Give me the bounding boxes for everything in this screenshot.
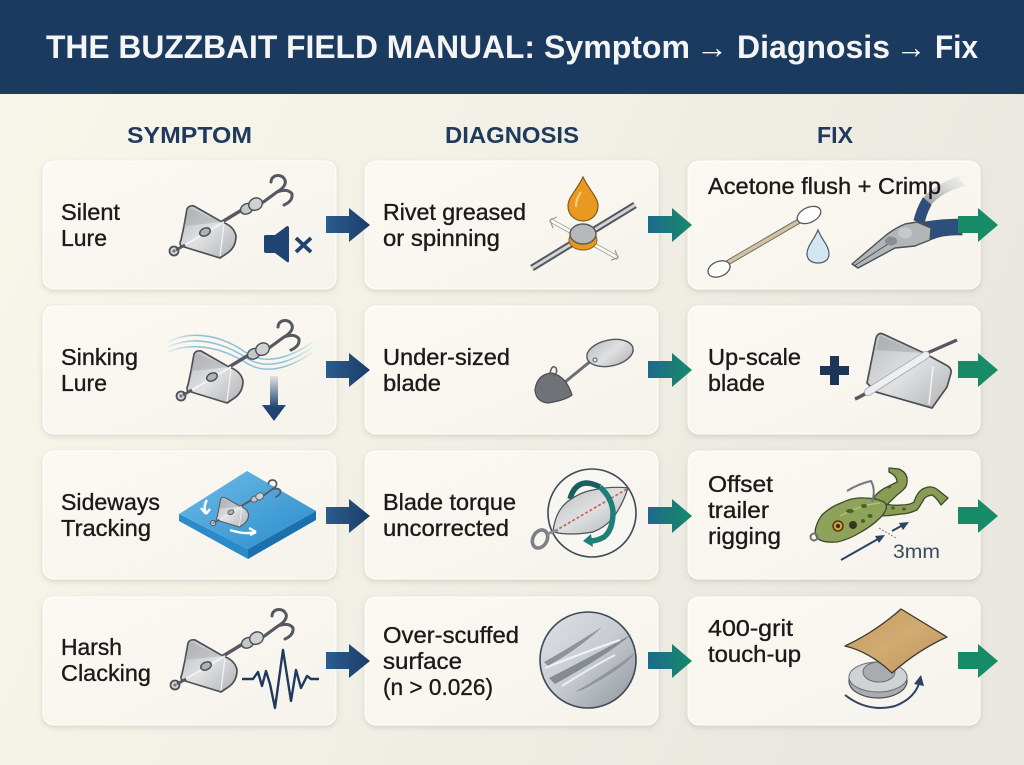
panel: sinking lure symptom: [43, 306, 336, 434]
icon: sound waveform: [242, 650, 319, 708]
icon: small blade on sinker: [535, 335, 636, 403]
arrow: diagnosis to fix row 4: [648, 644, 692, 678]
heading: diagnosis column: DIAGNOSIS: [445, 122, 579, 148]
icon: scratched metal disc: [540, 612, 636, 708]
icon: muted speaker: [264, 226, 311, 262]
panel: rivet greased diagnosis: [365, 161, 658, 289]
title banner: →: [896, 29, 926, 65]
text: blade torque uncorrected: uncorrected: [383, 515, 509, 541]
icon: acetone droplet: [807, 230, 829, 263]
icon: blade torque rotation: [529, 469, 636, 557]
icon: cotton swab: [706, 203, 823, 280]
title banner: Diagnosis: [737, 29, 890, 65]
text: sinking lure: Sinking: [61, 344, 138, 370]
text: harsh clacking: Harsh: [61, 634, 122, 660]
text: 400-grit touch-up: touch-up: [708, 641, 801, 667]
text: sideways tracking: Sideways: [61, 489, 160, 515]
text: blade torque uncorrected: Blade torque: [383, 489, 516, 515]
text: silent lure: Silent: [61, 199, 121, 225]
panel: 400-grit touch-up fix: [688, 597, 980, 725]
heading: fix column: FIX: [817, 122, 854, 148]
text: offset trailer rigging: rigging: [708, 523, 781, 549]
arrow: diagnosis to fix row 3: [648, 499, 692, 533]
icon: buzzbait lure: [170, 176, 292, 258]
icon: pliers: [852, 176, 965, 268]
text: under-sized blade: blade: [383, 370, 441, 396]
title banner: →: [696, 29, 728, 65]
arrow: symptom to diagnosis row 3: [326, 499, 370, 533]
icon: sanding disc with rotation: [845, 609, 947, 708]
arrow: fix outcome row 1: [958, 208, 998, 242]
text: up-scale blade: blade: [708, 370, 765, 396]
panel: acetone flush and crimp fix: [688, 161, 980, 289]
panel: sideways tracking symptom: [43, 451, 336, 579]
arrow: symptom to diagnosis row 2: [326, 353, 370, 387]
icon: frog trailer: [810, 468, 948, 542]
icon: 3mm offset callout: 3mm: [893, 542, 940, 563]
arrow: symptom to diagnosis row 4: [326, 644, 370, 678]
text: acetone flush and crimp: Acetone flush + Crimp: [708, 173, 941, 199]
text: under-sized blade: Under-sized: [383, 344, 510, 370]
text: 400-grit touch-up: 400-grit: [708, 615, 794, 641]
title banner: [0, 0, 1024, 94]
icon: buzzbait lure: [170, 610, 293, 692]
arrow: diagnosis to fix row 2: [648, 353, 692, 387]
title banner: THE BUZZBAIT FIELD MANUAL:: [46, 29, 535, 65]
icon: 3mm offset callout: [841, 522, 940, 563]
title banner: Fix: [935, 29, 978, 65]
text: harsh clacking: Clacking: [61, 660, 151, 686]
text: up-scale blade: Up-scale: [708, 344, 801, 370]
icon: plus sign: [820, 356, 849, 385]
heading: symptom column: SYMPTOM: [127, 122, 252, 148]
text: silent lure: Lure: [61, 225, 107, 251]
arrow: fix outcome row 4: [958, 644, 998, 678]
text: over-scuffed surface: Over-scuffed: [383, 622, 519, 648]
title banner: Symptom: [544, 29, 690, 65]
text: over-scuffed surface: surface: [383, 648, 462, 674]
icon: buzzbait lure: [176, 320, 299, 403]
text: rivet greased or spinning: Rivet greased: [383, 199, 526, 225]
arrow: fix outcome row 3: [958, 499, 998, 533]
arrow: fix outcome row 2: [958, 353, 998, 387]
text: over-scuffed surface: (n > 0.026): [383, 674, 493, 700]
panel: up-scale blade fix: [688, 306, 980, 434]
icon: sinking arrow: [262, 376, 286, 421]
panel: offset trailer rigging fix: [688, 451, 980, 579]
icon: grease drop on rivet: [532, 177, 635, 268]
text: offset trailer rigging: trailer: [708, 497, 769, 523]
arrow: symptom to diagnosis row 1: [326, 208, 370, 242]
panel: under-sized blade diagnosis: [365, 306, 658, 434]
text: offset trailer rigging: Offset: [708, 471, 774, 497]
arrow: diagnosis to fix row 1: [648, 208, 692, 242]
text: sideways tracking: Tracking: [61, 515, 151, 541]
icon: large blade: [855, 334, 957, 408]
text: rivet greased or spinning: or spinning: [383, 225, 500, 251]
icon: water plane with lure: [179, 471, 316, 559]
panel: silent lure symptom: [43, 161, 336, 289]
panel: over-scuffed surface diagnosis: [365, 597, 658, 725]
panel: harsh clacking symptom: [43, 597, 336, 725]
panel: blade torque diagnosis: [365, 451, 658, 579]
text: sinking lure: Lure: [61, 370, 107, 396]
icon: water waves: [168, 335, 313, 369]
